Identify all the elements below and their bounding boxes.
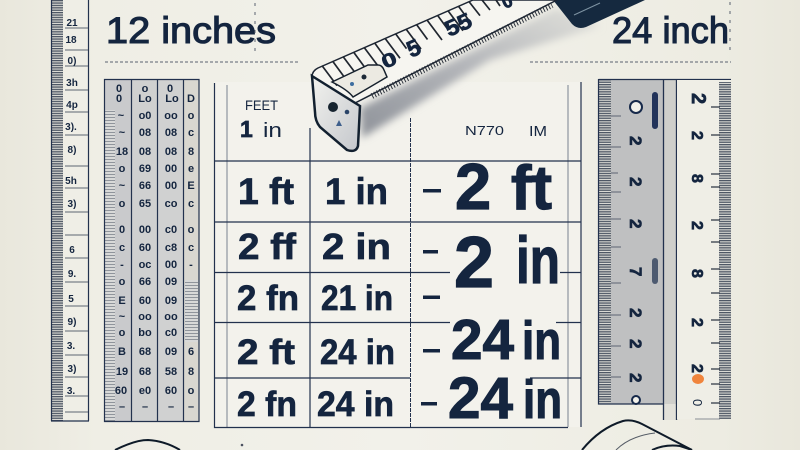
grid rows of numbers: 19 — [116, 366, 128, 378]
grid rows of numbers: c — [188, 127, 194, 139]
panel: left vertical ruler: 9) — [68, 317, 76, 328]
grid rows of numbers: 66 — [139, 180, 151, 192]
table row: 2 ft, 24 in: 24 — [451, 308, 514, 372]
roll of tape bottom right — [582, 420, 692, 450]
panel: left vertical ruler: 5 — [68, 294, 74, 305]
panel: conversion table — [214, 82, 581, 431]
grid rows of numbers: 66 — [139, 276, 151, 288]
ruler digits: 2 — [626, 308, 645, 317]
tape case — [553, 0, 645, 28]
table header: IM — [529, 123, 547, 140]
grid rows of numbers: oo — [164, 311, 178, 323]
table header: in — [263, 120, 282, 142]
grid rows of numbers: 00 — [165, 163, 177, 175]
grid rows of numbers: E — [118, 295, 126, 307]
grid rows of numbers: ~ — [119, 127, 126, 139]
table row: 2 fn, 24 in: in — [523, 370, 562, 430]
grid rows of numbers: – — [142, 401, 148, 413]
table header: FEET — [245, 97, 278, 113]
grid header numbers: 0 — [167, 83, 173, 95]
table row: 1 ft: 2 — [455, 150, 491, 223]
grid rows of numbers: 00 — [165, 180, 177, 192]
grid rows of numbers: E — [187, 180, 195, 192]
panel: left vertical ruler: 0) — [68, 56, 76, 67]
grid rows of numbers: 69 — [139, 163, 151, 175]
grid rows of numbers: 08 — [165, 127, 177, 139]
grid rows of numbers: o — [119, 327, 126, 339]
tape blade — [312, 0, 557, 103]
grid rows of numbers: o — [188, 385, 195, 397]
grid header numbers: Lo — [138, 93, 152, 105]
grid rows of numbers: o — [119, 163, 126, 175]
table row: 2 fn, 21 in: 2 fn — [237, 279, 299, 318]
table header — [240, 97, 547, 142]
panel: right white ruler — [677, 80, 731, 419]
grid rows of numbers: e — [188, 163, 194, 175]
grid header numbers: 0 — [116, 83, 122, 95]
tape rivet clip — [332, 65, 387, 97]
grid rows of numbers: 08 — [139, 146, 151, 158]
grid rows of numbers: c0 — [165, 327, 177, 339]
ruler hole top — [630, 101, 642, 113]
table row: 2 ft, 24 in: 24 in — [320, 333, 395, 372]
grid rows of numbers: – — [188, 401, 194, 413]
grid rows of numbers: o — [188, 110, 195, 122]
ruler digits: 2 — [626, 373, 645, 382]
table row: 2 fn, 21 in — [237, 279, 440, 318]
grid header numbers: D — [187, 93, 195, 105]
grid rows of numbers: 09 — [165, 346, 177, 358]
grid rows of numbers: c0 — [165, 224, 177, 236]
ruler brand pill top — [652, 92, 658, 129]
panel: left vertical ruler: 3h — [66, 78, 78, 89]
table row: 2 ft, 2 in: 2 — [454, 223, 494, 303]
panel: right grey ruler — [598, 79, 663, 404]
panel: right white ruler: 0 — [690, 399, 705, 406]
grid header numbers: Lo — [165, 93, 179, 105]
grid rows of numbers: 60 — [165, 385, 177, 397]
grid rows of numbers: - — [189, 259, 193, 271]
panel: right white ruler: 8 — [688, 269, 705, 278]
panel: right white ruler: 2 — [688, 364, 705, 373]
tape measure illustration — [312, 0, 645, 151]
grid rows of numbers — [115, 110, 195, 413]
ruler digits: 2 — [626, 136, 645, 145]
table row: 2 ft, 2 in: 2 in — [322, 226, 391, 267]
panel: left vertical ruler: 5h — [65, 176, 77, 187]
panel: right white ruler: 8 — [688, 174, 705, 183]
grid rows of numbers: – — [168, 401, 174, 413]
grid rows of numbers: 60 — [115, 385, 127, 397]
panel: left vertical ruler: 4p — [66, 100, 78, 111]
grid rows of numbers: co — [165, 198, 178, 210]
panel: left vertical ruler: 9. — [68, 269, 76, 280]
table row: 1 ft: 1 ft — [238, 171, 294, 212]
table row: 2 fn, 24 in: 24 — [448, 366, 513, 431]
panel: left vertical ruler: 3) — [68, 364, 76, 375]
grid rows of numbers: o0 — [139, 110, 151, 122]
grid rows of numbers: 60 — [139, 242, 151, 254]
table row: 2 fn, 24 in — [237, 366, 562, 431]
table row: 2 ft, 24 in — [237, 308, 561, 372]
grid rows of numbers: oo — [164, 110, 178, 122]
grid rows of numbers: o — [119, 276, 126, 288]
grid rows of numbers: - — [120, 259, 124, 271]
grid header numbers: o — [142, 83, 149, 95]
grid rows of numbers: 8 — [188, 366, 194, 378]
grid rows of numbers: 09 — [165, 276, 177, 288]
panel: right white ruler: 2 — [687, 93, 709, 104]
grid rows of numbers: ~ — [118, 110, 125, 122]
grid rows of numbers: 8 — [188, 146, 194, 158]
grid rows of numbers: 00 — [139, 224, 151, 236]
grid rows of numbers: 58 — [165, 366, 177, 378]
ruler digits: 2 — [626, 219, 645, 228]
grid rows of numbers: 68 — [139, 366, 151, 378]
grid rows of numbers: 09 — [165, 295, 177, 307]
grid rows of numbers: 08 — [165, 146, 177, 158]
panel: left vertical ruler: 3. — [67, 386, 75, 397]
table row: 2 ft, 24 in: 2 ft — [237, 333, 295, 372]
panel: number grid ruler — [104, 79, 199, 422]
panel: right white ruler: 2 — [688, 318, 705, 327]
grid rows of numbers: 18 — [116, 146, 128, 158]
table row: 1 ft — [238, 150, 552, 223]
panel: left vertical ruler: 21 — [66, 18, 78, 29]
orange mark — [692, 374, 704, 384]
grid header numbers: 0 — [116, 93, 122, 105]
panel: left vertical ruler: 18 — [65, 35, 77, 46]
tape measure illustration: 55 — [441, 8, 476, 42]
table row: 2 fn, 21 in: 21 in — [321, 279, 393, 318]
panel: left vertical ruler: 3. — [67, 341, 75, 352]
ruler divider strip — [663, 79, 731, 420]
table row: 2 fn, 24 in: 2 fn — [237, 385, 297, 424]
table row: 2 ft, 2 in: in — [516, 223, 560, 297]
title: 24 inch: 24 inch — [612, 10, 729, 51]
grid rows of numbers: oc — [139, 259, 151, 271]
grid rows of numbers: 68 — [139, 346, 151, 358]
ruler digits: 7 — [626, 267, 645, 276]
grid rows of numbers: 6 — [188, 346, 194, 358]
ruler hole bottom — [632, 396, 640, 404]
table row: 2 ft, 2 in: 2 ff — [238, 226, 297, 267]
table row: 1 ft: 1 in — [325, 171, 388, 212]
panel: left vertical ruler: 6 — [69, 245, 75, 256]
panel: right white ruler: 2 — [688, 221, 705, 230]
grid rows of numbers: B — [118, 346, 126, 358]
ruler digits: 2 — [626, 339, 645, 348]
grid rows of numbers: 60 — [139, 295, 151, 307]
ruler digits: 2 — [626, 177, 645, 186]
grid rows of numbers: bo — [138, 327, 152, 339]
table row: 2 fn, 24 in: 24 in — [317, 385, 394, 424]
grid rows of numbers: c — [188, 242, 194, 254]
panel: left vertical ruler: 3). — [65, 122, 77, 133]
panel: left vertical ruler — [51, 0, 89, 421]
grid rows of numbers: o — [119, 198, 126, 210]
grid rows of numbers: c8 — [165, 242, 177, 254]
grid rows of numbers: oo — [138, 311, 152, 323]
panel: right white ruler: 2 — [688, 131, 705, 140]
grid rows of numbers: c — [119, 242, 125, 254]
title: 12 inches: 12 inches — [106, 10, 276, 51]
table header: 1 — [240, 116, 253, 142]
grid rows of numbers: ~ — [119, 311, 126, 323]
grid rows of numbers: ~ — [119, 180, 126, 192]
table row: 2 ft, 2 in — [238, 223, 560, 303]
grid rows of numbers: c — [188, 198, 194, 210]
grid rows of numbers: 0 — [119, 224, 125, 236]
panel: left vertical ruler: 8) — [68, 145, 76, 156]
grid header numbers — [116, 83, 195, 105]
grid rows of numbers: 65 — [139, 198, 151, 210]
grid rows of numbers: e0 — [139, 385, 151, 397]
tape measure illustration: 0 — [378, 47, 400, 73]
panel: left vertical ruler: 3) — [68, 199, 76, 210]
table header: N770 — [465, 123, 504, 138]
ruler brand pill bottom — [652, 258, 658, 284]
ruler digits — [626, 136, 645, 382]
grid rows of numbers: 00 — [165, 259, 177, 271]
table row: 2 ft, 24 in: in — [522, 311, 561, 371]
tape hook front — [312, 76, 360, 151]
grid rows of numbers: 08 — [139, 127, 151, 139]
tape measure illustration: 5 — [402, 34, 425, 63]
table row: 1 ft: ft — [511, 154, 552, 223]
roll of tape bottom left — [115, 440, 180, 450]
grid rows of numbers: – — [119, 401, 125, 413]
small mark — [241, 444, 243, 446]
grid rows of numbers: o — [188, 224, 195, 236]
